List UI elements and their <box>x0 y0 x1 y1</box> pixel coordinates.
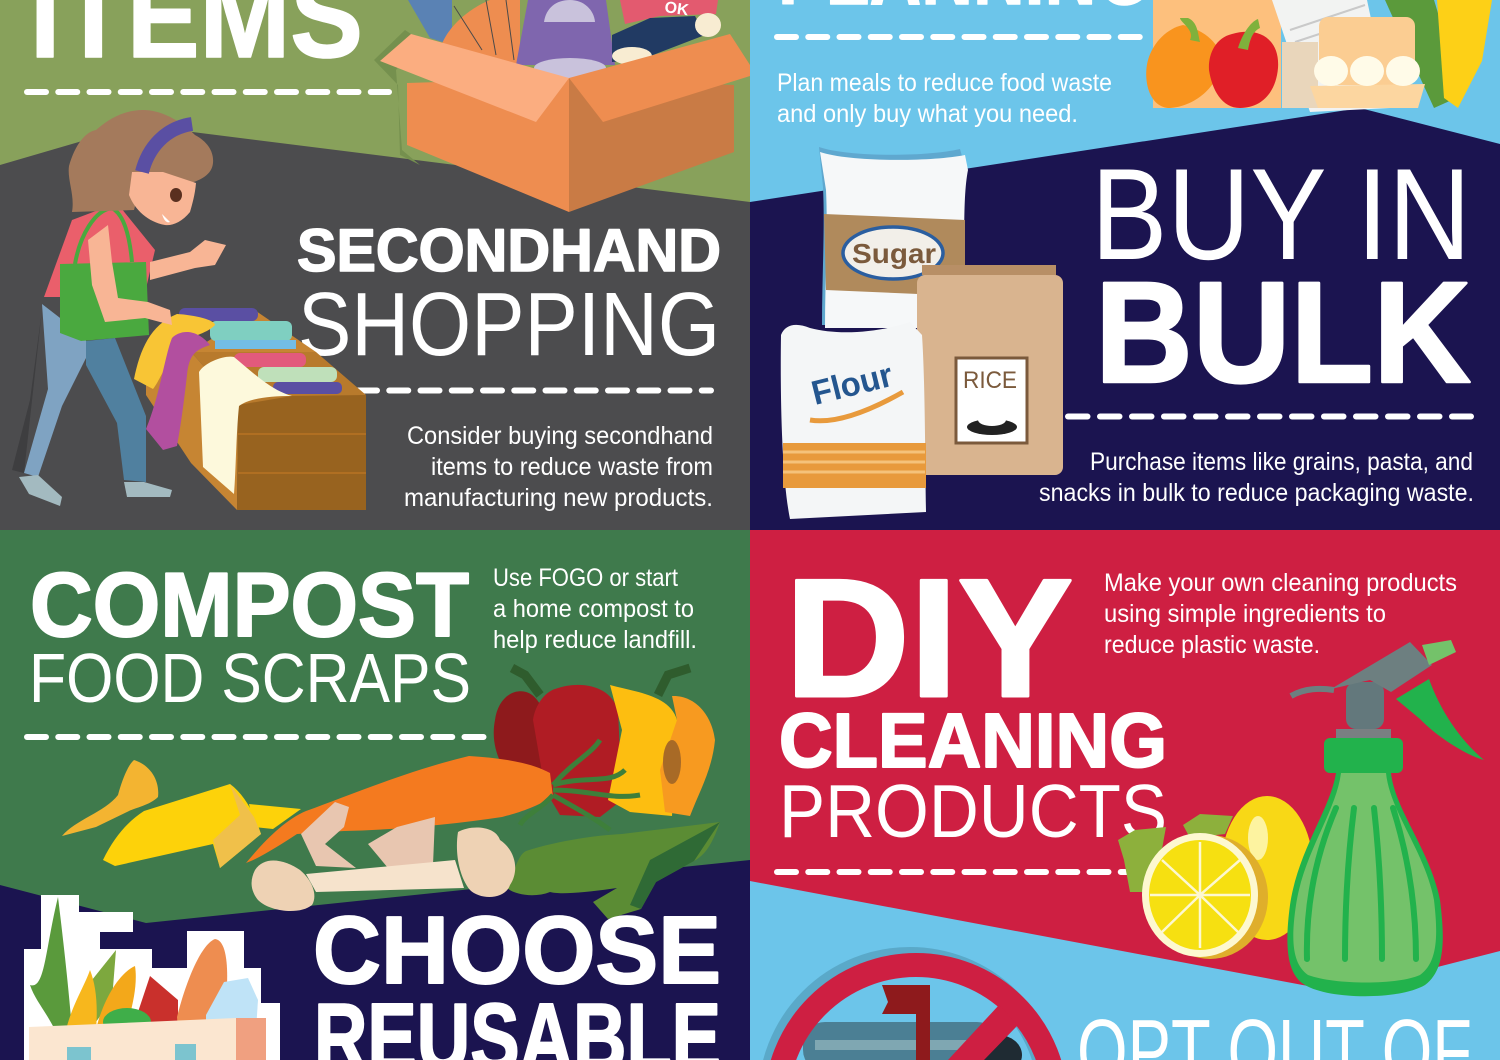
description: bulk: Purchase items like grains, pasta, and <box>1090 448 1473 476</box>
panel background blue <box>750 0 1500 530</box>
illustration: donation box <box>374 0 750 212</box>
heading: cleaning: CLEANING <box>779 698 1167 784</box>
divider <box>27 734 495 740</box>
heading: bulk: BULK <box>1095 252 1471 413</box>
panel background olive <box>0 0 750 530</box>
heading: compost: COMPOST <box>30 555 469 656</box>
description: diy: reduce plastic waste. <box>1104 631 1320 659</box>
illustration: rice bag <box>917 265 1063 475</box>
heading: products: PRODUCTS <box>779 769 1167 853</box>
panel background crimson <box>750 530 1500 1060</box>
description: compost: Use FOGO or start <box>493 564 678 592</box>
panel background blue <box>750 881 1500 1060</box>
illustration: no mail sign <box>770 959 1056 1060</box>
panel background navy <box>750 108 1500 530</box>
description: secondhand: Consider buying secondhand <box>407 422 713 450</box>
panel background navy <box>0 860 750 1060</box>
illustration: groceries <box>1146 0 1492 112</box>
heading: food scraps: FOOD SCRAPS <box>29 639 471 717</box>
description: secondhand: manufacturing new products. <box>404 484 713 512</box>
illustration: food scraps <box>62 668 720 919</box>
description: diy: Make your own cleaning products <box>1104 569 1457 597</box>
description: diy: using simple ingredients to <box>1104 600 1386 628</box>
description: planning <box>777 69 1112 128</box>
illustration: flour bag: Flour <box>808 356 896 413</box>
panel: buy in bulk <box>750 0 1500 530</box>
illustration: flour bag <box>781 322 926 519</box>
description: secondhand: items to reduce waste from <box>431 453 713 481</box>
divider top <box>777 34 1150 40</box>
heading: choose: CHOOSE <box>313 897 721 1004</box>
description: compost: a home compost to <box>493 595 694 623</box>
divider lower <box>1068 414 1471 420</box>
heading: secondhand: SECONDHAND <box>297 217 721 284</box>
description: diy <box>1104 569 1457 659</box>
illustration: reusable grocery bag <box>24 895 280 1060</box>
illustration: rice bag: RICE <box>963 367 1017 394</box>
divider <box>777 869 1132 875</box>
description: bulk: snacks in bulk to reduce packaging waste. <box>1039 479 1474 507</box>
description: compost: help reduce landfill. <box>493 626 697 654</box>
description: secondhand <box>404 422 713 512</box>
description: compost <box>493 564 697 654</box>
panel: secondhand items <box>0 0 750 530</box>
illustration: sugar bag <box>819 147 968 328</box>
panel: diy cleaning products <box>750 530 1500 1060</box>
description: bulk <box>1039 448 1474 507</box>
description: planning: Plan meals to reduce food waste <box>777 69 1112 97</box>
heading: shopping: SHOPPING <box>298 275 720 375</box>
heading: diy: DIY <box>785 544 1073 732</box>
illustration: crates with clothes <box>134 308 366 510</box>
panel background grey <box>0 125 750 530</box>
panel: compost food scraps <box>0 530 750 1060</box>
divider lower <box>358 388 711 394</box>
illustration: woman shopping <box>12 110 226 506</box>
illustration: lemons <box>1118 796 1313 959</box>
illustration: spray bottle <box>1287 640 1484 996</box>
illustration: sugar bag: Sugar <box>852 238 936 269</box>
description: planning: and only buy what you need. <box>777 100 1078 128</box>
divider top <box>27 89 389 95</box>
panel background green <box>0 530 750 1060</box>
